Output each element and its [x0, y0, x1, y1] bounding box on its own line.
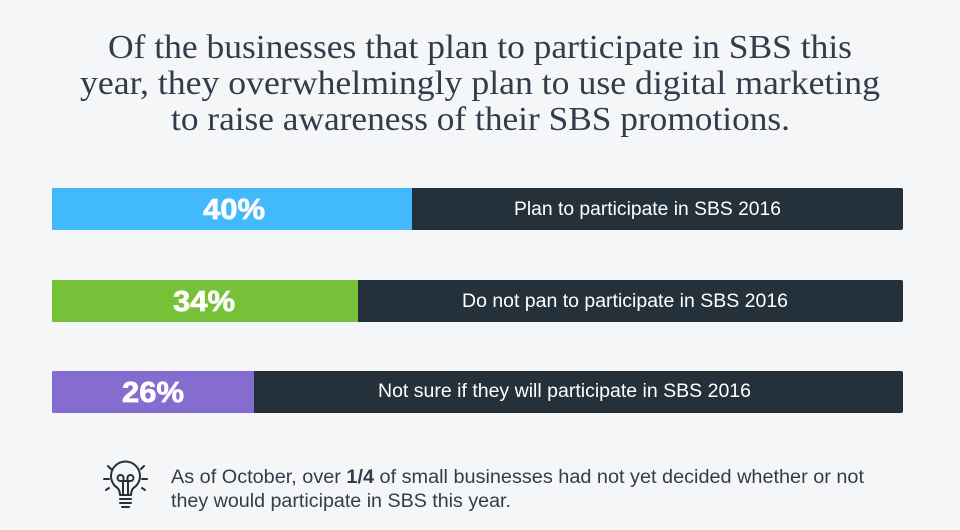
note text: they would participate in SBS this year. [171, 491, 511, 512]
bar: not sure 26%: Not sure if they will participate in SBS 2016 [378, 381, 751, 402]
bar: not sure 26%: 26% [122, 377, 184, 409]
note text: As of October, over 1/4 of small businesses had not yet decided whether or not [171, 467, 865, 488]
title: year, they overwhelmingly plan to use digital marketing [80, 65, 880, 102]
title: Of the businesses that plan to participate in SBS this [108, 29, 852, 66]
note text [171, 467, 865, 512]
bar: do not plan to participate 34%: Do not pan to participate in SBS 2016 [462, 291, 788, 312]
bar: do not plan to participate 34% [52, 280, 903, 322]
bar: plan to participate 40%: Plan to participate in SBS 2016 [514, 199, 781, 220]
bar: plan to participate 40%: 40% [203, 194, 265, 226]
title [80, 29, 880, 138]
title: to raise awareness of their SBS promotions. [171, 101, 790, 138]
bar: do not plan to participate 34%: 34% [173, 286, 235, 318]
bar: not sure 26% [52, 371, 903, 413]
bar: plan to participate 40% [52, 188, 903, 230]
icon: light bulb [104, 462, 147, 507]
